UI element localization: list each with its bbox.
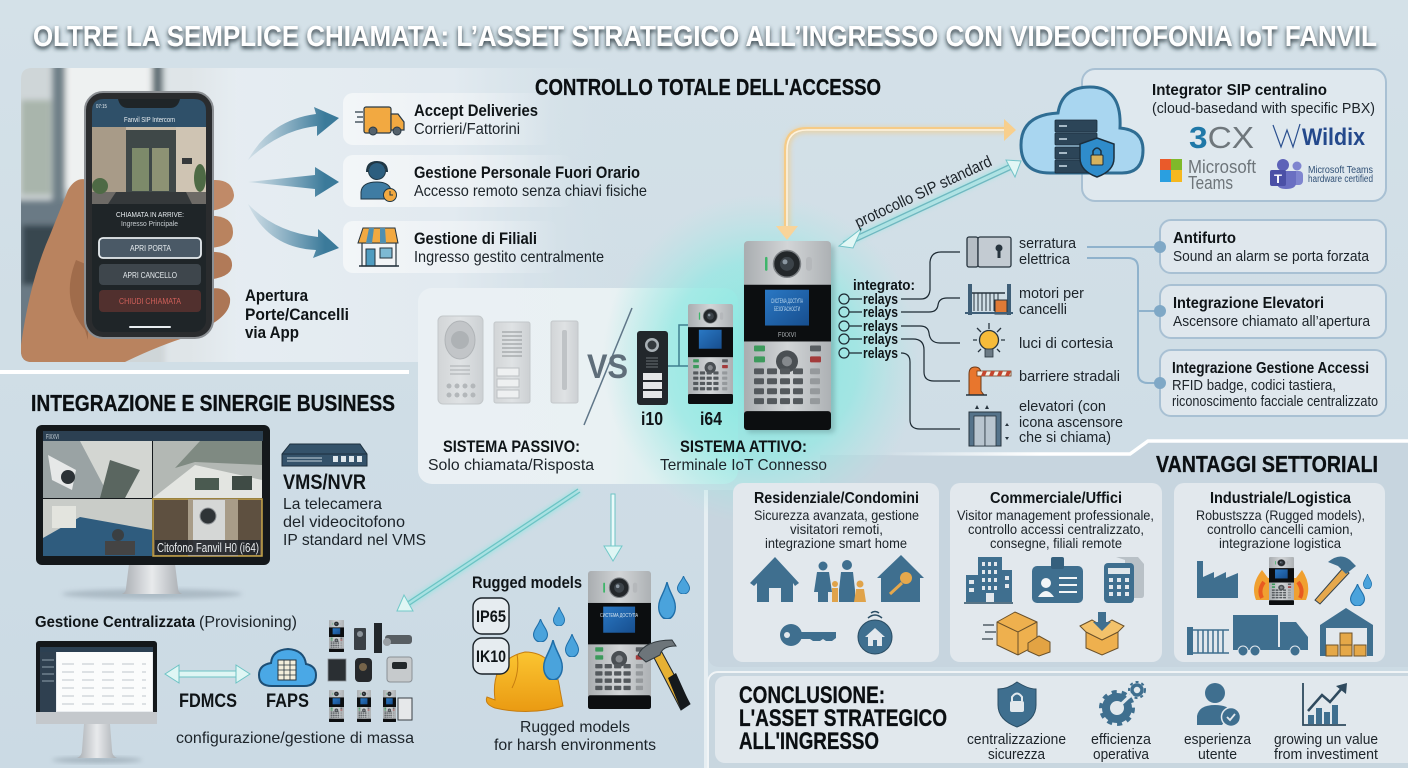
label: protocollo sip: protocollo SIP standard (853, 153, 995, 232)
icon: house with key (877, 555, 924, 602)
panel: industriale: Industriale/Logistica (1210, 490, 1351, 507)
arrow: teal to rugged (604, 494, 622, 561)
panel: conclusione: esperienza (1184, 731, 1252, 748)
device i64 (688, 304, 733, 429)
icons: water drops (534, 576, 690, 680)
card: antifurto (1154, 220, 1386, 273)
labels: relay outputs (1019, 235, 1123, 446)
device i10: i10 (641, 409, 663, 429)
panel: vantaggi background (708, 441, 1408, 667)
labels: relay outputs: barriere stradali (1019, 368, 1120, 385)
arrow: teal to provisioning (397, 489, 580, 611)
heading: rugged models: Rugged models (472, 573, 582, 592)
relays list: relays (863, 345, 898, 362)
heading: integrazione: INTEGRAZIONE E SINERGIE BUSINESS (31, 390, 395, 416)
badge: ip65 (473, 598, 509, 634)
panel: sistema passivo vs attivo background (418, 288, 738, 484)
logo: teams certified: hardware certified (1308, 174, 1373, 185)
panel: conclusione: sicurezza (988, 746, 1046, 763)
heading: controllo totale: CONTROLLO TOTALE DELL'ACCESSO (535, 74, 881, 100)
label: sistema passivo (428, 437, 594, 474)
relays list: relays (863, 331, 898, 348)
relays list: relays (863, 318, 898, 335)
icon: road barrier (966, 367, 1011, 395)
icon: factory (1197, 561, 1238, 598)
logo: microsoft teams (1160, 157, 1256, 193)
icon: house (750, 557, 799, 602)
panel: integrator sip (1082, 69, 1386, 201)
icon: calculator (1104, 557, 1144, 603)
icon: delivery boxes (982, 612, 1050, 656)
photo: hand holding phone with app: APRI PORTA (130, 244, 172, 253)
label: sistema passivo: Solo chiamata/Risposta (428, 457, 594, 474)
main intercom device: FIXXVI (778, 332, 796, 339)
text: vms/nvr: IP standard nel VMS (283, 532, 426, 549)
icon: device in fire (1254, 557, 1308, 605)
panel: commerciale (950, 483, 1162, 662)
icon: courtesy light (973, 323, 1005, 357)
phone (85, 92, 213, 338)
vs divider (584, 308, 632, 425)
panel: residenziale: visitatori remoti, (790, 521, 883, 537)
photo: hand holding phone with app: CHIAMATA IN ARRIVE: (116, 210, 184, 219)
panel: conclusione: CONCLUSIONE: (739, 682, 885, 709)
icon: family (814, 560, 866, 602)
labels: relay outputs: elettrica (1019, 251, 1071, 268)
photo: hand holding phone with app: Ingresso Principale (121, 221, 178, 228)
monitor: provisioning dashboard (36, 641, 157, 763)
icon: agent with clock (361, 162, 396, 202)
icon: electric lock (967, 237, 1011, 267)
card: elevatori (1154, 285, 1386, 338)
heading: gestione centralizzata (35, 614, 297, 631)
labels: relay outputs: luci di cortesia (1019, 335, 1114, 352)
monitor: vms view: FIXXVI (46, 434, 59, 441)
labels: fdmcs faps: FAPS (266, 691, 309, 712)
relays list: relays (863, 291, 898, 308)
icon: hammer (638, 640, 690, 710)
labels: fdmcs faps: configurazione/gestione di massa (176, 730, 414, 747)
text: vms/nvr (283, 471, 426, 549)
text: vms/nvr: del videocitofono (283, 514, 405, 531)
card: deliveries: Accept Deliveries (414, 101, 538, 120)
logo: wildix: Wildix (1302, 124, 1366, 151)
icon: truck (1233, 615, 1308, 656)
logo: wildix (1273, 124, 1366, 151)
icon: shop (358, 228, 399, 266)
labels: fdmcs faps (176, 691, 414, 747)
icon: nvr recorder (282, 444, 367, 466)
heading: gestione centralizzata: Gestione Centralizzata (35, 614, 195, 631)
card: personale (343, 155, 647, 207)
icon: elevator (969, 405, 1009, 446)
panel: conclusione: from investiment (1274, 746, 1379, 763)
icon: smart home (858, 612, 892, 654)
connectors to feature cards (1087, 247, 1160, 383)
icon: office building (964, 557, 1013, 603)
logo: teams certified: T (1274, 172, 1283, 186)
panel: residenziale (733, 483, 939, 662)
logo: microsoft teams: Teams (1188, 173, 1233, 193)
panel: industriale: controllo cancelli camion, (1207, 521, 1353, 537)
card: elevatori: Integrazione Elevatori (1173, 295, 1324, 312)
photo: hand holding phone with app: 07:15 (96, 104, 107, 110)
panel: commerciale: consegne, filiali remote (990, 535, 1122, 551)
card: elevatori: Ascensore chiamato all’apertura (1173, 313, 1371, 330)
rugged device with hard hat and hammer: СИСТЕМА ДОСТУПА (600, 613, 639, 619)
text: vms/nvr: VMS/NVR (283, 471, 366, 494)
text: rugged caption (494, 719, 656, 754)
card: personale: Accesso remoto senza chiavi fisiche (414, 183, 647, 200)
camera pane 4: citofono (153, 499, 262, 556)
icon: hard hat (486, 652, 563, 712)
logo: teams certified (1270, 159, 1373, 189)
camera pane 2 (153, 441, 262, 498)
device i10 (637, 325, 688, 429)
icon: user check (1197, 683, 1240, 726)
panel: commerciale: controllo accessi centralizzato, (968, 521, 1144, 537)
icon: hammer with drop (1315, 556, 1372, 606)
panel: conclusione: operativa (1093, 746, 1150, 763)
panel: conclusione: efficienza (1091, 731, 1152, 748)
panel: commerciale: Visitor management professionale, (957, 507, 1154, 523)
labels: relay outputs: che si chiama) (1019, 429, 1111, 446)
labels: relay outputs: serratura (1019, 235, 1077, 252)
camera pane 1 (43, 441, 152, 498)
card: filiali: Ingresso gestito centralmente (414, 249, 604, 266)
card: gestione accessi (1154, 350, 1386, 416)
text: vms/nvr: La telecamera (283, 496, 382, 513)
device i64: i64 (700, 409, 722, 429)
device grid (328, 620, 412, 722)
label: sistema attivo: SISTEMA ATTIVO: (680, 437, 807, 456)
label: apertura via app: via App (245, 323, 299, 342)
label: apertura via app (245, 286, 349, 342)
icon: gate motor (965, 284, 1013, 315)
panel: integrator sip: (cloud-basedand with specific PBX) (1152, 100, 1375, 117)
photo: hand holding phone with app (21, 68, 234, 362)
icon: cloud with server and shield (1021, 87, 1143, 177)
camera pane 4: citofono: Citofono Fanvil H0 (i64) (157, 540, 259, 555)
icon: key (780, 624, 836, 646)
heading: gestione centralizzata: (Provisioning) (199, 614, 297, 631)
label: sistema passivo: SISTEMA PASSIVO: (443, 437, 580, 456)
panel: conclusione: L'ASSET STRATEGICO (739, 705, 947, 732)
panel: industriale (1174, 483, 1385, 662)
photo: hand holding phone with app: Fanvil SIP Intercom (124, 117, 175, 124)
text: rugged caption: Rugged models (520, 719, 630, 736)
photo: hand holding phone with app: APRI CANCELLO (123, 271, 177, 280)
panel: conclusione: centralizzazione (967, 731, 1066, 748)
main intercom device (744, 241, 835, 433)
relays list: relays (863, 304, 898, 321)
icon: id badge (1032, 557, 1083, 603)
relays list (839, 252, 960, 429)
panel: industriale: Robustszza (Rugged models), (1196, 507, 1365, 523)
label: apertura via app: Porte/Cancelli (245, 305, 349, 324)
icon: truck (355, 107, 404, 135)
logo: microsoft teams: Microsoft (1188, 157, 1256, 177)
teal glow (602, 195, 922, 525)
camera pane 3 (43, 499, 152, 556)
logo: teams certified: Microsoft Teams (1308, 165, 1373, 176)
icon: gear (1101, 682, 1145, 724)
card: deliveries: Corrieri/Fattorini (414, 121, 520, 138)
photo: hand holding phone with app: CHIUDI CHIAMATA (119, 297, 182, 306)
main intercom device: БЕЗОПАСНОСТИ (774, 307, 800, 313)
card: gestione accessi: Integrazione Gestione Accessi (1172, 360, 1369, 377)
panel: conclusione: utente (1198, 746, 1237, 763)
hand (21, 179, 190, 362)
card: filiali: Gestione di Filiali (414, 229, 537, 248)
labels: fdmcs faps: FDMCS (179, 691, 237, 712)
labels: relay outputs: elevatori (con (1019, 398, 1106, 415)
panel: conclusione (708, 672, 1408, 768)
card: gestione accessi: RFID badge, codici tastiera, (1172, 377, 1336, 394)
panel: residenziale: Sicurezza avanzata, gestione (754, 507, 919, 523)
panel: accesso background (200, 68, 620, 362)
badge: ik10 (473, 638, 509, 674)
icon: warehouse (1320, 608, 1373, 656)
labels: relay outputs: icona ascensore (1019, 414, 1123, 431)
panel: residenziale: integrazione smart home (765, 535, 907, 551)
arrows from phone (248, 107, 339, 258)
logo: 3cx: 3CX (1189, 120, 1254, 155)
icon: faps cloud (259, 649, 316, 686)
labels: relay outputs: motori per (1019, 285, 1084, 302)
rugged device with hard hat and hammer (486, 571, 690, 712)
panel: conclusione: ALL'INGRESSO (739, 728, 879, 755)
icon: shield (998, 682, 1036, 727)
icon: open box (1080, 612, 1124, 655)
badge: ip65: IP65 (476, 607, 506, 626)
card: deliveries (343, 93, 553, 145)
main intercom device: СИСТЕМА ДОСТУПА (771, 299, 803, 305)
icon: gate (1187, 627, 1229, 655)
vs divider: VS (587, 348, 628, 386)
card: antifurto: Antifurto (1173, 230, 1236, 247)
relays list: integrato: (853, 277, 915, 294)
monitor: vms view (36, 425, 270, 599)
panel: integrator sip: Integrator SIP centralino (1152, 82, 1327, 99)
panel: industriale: integrazione logistica (1219, 535, 1341, 551)
text: rugged caption: for harsh environments (494, 737, 656, 754)
panel: conclusione: growing un value (1274, 731, 1378, 748)
arrow: orange sip link (776, 119, 1016, 240)
panel: commerciale: Commerciale/Uffici (990, 490, 1122, 507)
label: apertura via app: Apertura (245, 286, 308, 305)
panel: residenziale: Residenziale/Condomini (754, 490, 919, 507)
labels: relay outputs: cancelli (1019, 301, 1067, 318)
card: filiali (343, 221, 604, 273)
passive devices (438, 316, 578, 404)
card: antifurto: Sound an alarm se porta forzata (1173, 248, 1370, 265)
arrow: teal sip protocol (839, 160, 1021, 248)
icon: growth chart (1303, 683, 1347, 725)
arrow: fdmcs double (165, 665, 250, 683)
badge: ik10: IK10 (476, 647, 506, 666)
label: sistema attivo: Terminale IoT Connesso (660, 457, 827, 474)
card: personale: Gestione Personale Fuori Orario (414, 163, 640, 182)
door view (92, 127, 206, 204)
label: sistema attivo (660, 437, 827, 474)
